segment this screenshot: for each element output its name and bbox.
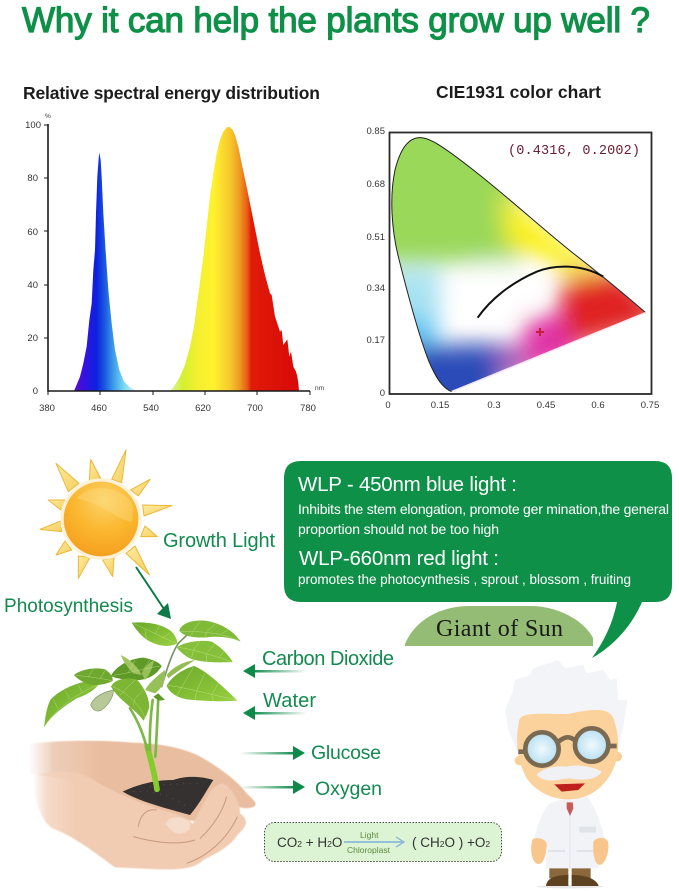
y axis labels — [25, 120, 41, 397]
chart: CIE1931 color chart — [366, 128, 659, 408]
leaves — [91, 690, 113, 711]
thumbnail — [166, 817, 190, 834]
y axis labels: 0.51 — [366, 232, 385, 243]
x axis labels: 540 — [143, 403, 159, 414]
axis units: nm — [315, 385, 324, 392]
blue peak — [74, 152, 137, 391]
y axis labels: 40 — [27, 280, 38, 291]
axis units — [45, 113, 324, 392]
x axis labels: 620 — [195, 403, 211, 414]
arrow: sun to plant — [136, 567, 171, 619]
tie — [567, 802, 573, 816]
x axis labels: 380 — [39, 403, 55, 414]
y axis labels — [366, 126, 385, 399]
arrow: oxygen — [240, 780, 305, 794]
y axis labels: 0 — [33, 386, 38, 397]
x axis labels: 460 — [91, 403, 107, 414]
coordinate readout: (0.4316, 0.2002) — [508, 144, 640, 159]
speech bubble — [284, 461, 672, 658]
red peak — [170, 127, 299, 391]
arrow: water — [243, 706, 307, 720]
illustration: scientist — [505, 660, 627, 888]
hands — [531, 838, 608, 865]
y axis labels: 0 — [380, 388, 385, 399]
x axis labels — [385, 400, 659, 411]
y axis labels: 0.68 — [366, 179, 385, 190]
products: ( CH2O ) +O2 — [412, 835, 490, 850]
glasses — [518, 728, 617, 766]
x axis labels: 0 — [385, 400, 391, 411]
soil — [123, 777, 213, 815]
equation box — [264, 822, 502, 862]
finger details — [133, 797, 237, 863]
hair — [505, 660, 627, 750]
spectral locus outline — [392, 138, 646, 392]
x axis labels: 0.3 — [487, 400, 501, 411]
label: Growth Light: Growth Light — [163, 530, 275, 552]
shoes and trousers — [546, 867, 599, 886]
chart frame — [390, 132, 652, 394]
x axis labels: 0.45 — [537, 400, 555, 411]
text: red light description: promotes the photocynthesis , sprout , blossom , fruiting — [298, 572, 631, 587]
colour point marker — [536, 328, 544, 336]
moustache — [537, 765, 602, 781]
reactants: CO2 + H2O — [277, 835, 342, 850]
reaction arrow — [344, 837, 404, 847]
heading: blue light: WLP - 450nm blue light : — [298, 473, 517, 496]
x axis labels — [39, 403, 316, 414]
heading: red light: WLP-660nm red light : — [299, 547, 499, 570]
x axis labels: 780 — [300, 403, 316, 414]
illustration: plant — [44, 620, 241, 789]
lab coat — [533, 797, 607, 868]
planckian curve — [478, 267, 603, 318]
label: Photosynthesis: Photosynthesis — [4, 596, 133, 617]
illustration: hands — [28, 741, 256, 869]
x axis labels: 0.75 — [641, 400, 659, 411]
y axis labels: 0.17 — [366, 335, 385, 346]
badge: Giant of Sun — [405, 606, 593, 646]
heading: spectral chart: Relative spectral energy distribution — [23, 83, 320, 103]
label: Light: Light — [360, 830, 379, 840]
ears — [515, 752, 622, 765]
stems — [130, 633, 189, 789]
label: Oxygen: Oxygen — [315, 778, 382, 800]
axes — [44, 124, 310, 395]
x axis labels: 0.15 — [431, 400, 449, 411]
leaf veins — [47, 622, 239, 723]
x axis labels: 700 — [247, 403, 263, 414]
label: Glucose: Glucose — [311, 742, 381, 764]
title: Why it can help the plants grow up well ? — [22, 1, 650, 40]
label: Chloroplast: Chloroplast — [347, 845, 391, 855]
y axis labels: 0.34 — [366, 283, 385, 294]
y axis labels: 0.85 — [366, 126, 385, 137]
y axis labels: 80 — [27, 173, 38, 184]
x axis labels: 0.6 — [591, 400, 605, 411]
purple line — [452, 313, 646, 392]
y axis labels: 100 — [25, 120, 41, 131]
text: blue light description: Inhibits the stem elongation, promote ger mination,the general — [298, 501, 669, 517]
label: Water: Water — [263, 690, 316, 712]
text: blue light description — [298, 501, 669, 537]
icon: sun — [40, 450, 172, 578]
text: blue light description: proportion should not be too high — [298, 521, 499, 537]
y axis labels: 60 — [27, 227, 38, 238]
chromaticity colour field — [392, 138, 644, 392]
badge: Giant of Sun: Giant of Sun — [436, 616, 563, 642]
back hand — [28, 741, 256, 827]
front hand — [33, 771, 246, 869]
mouth — [554, 783, 585, 792]
y axis labels: 20 — [27, 333, 38, 344]
ground shadow — [537, 885, 603, 888]
chart: spectral energy distribution — [25, 113, 324, 414]
label: Carbon Dioxide: Carbon Dioxide — [262, 648, 394, 670]
arrow: carbon dioxide — [243, 664, 307, 678]
axis units: % — [45, 113, 51, 120]
face — [517, 710, 618, 799]
heading: CIE chart: CIE1931 color chart — [436, 82, 601, 102]
arrow: glucose — [240, 746, 305, 760]
